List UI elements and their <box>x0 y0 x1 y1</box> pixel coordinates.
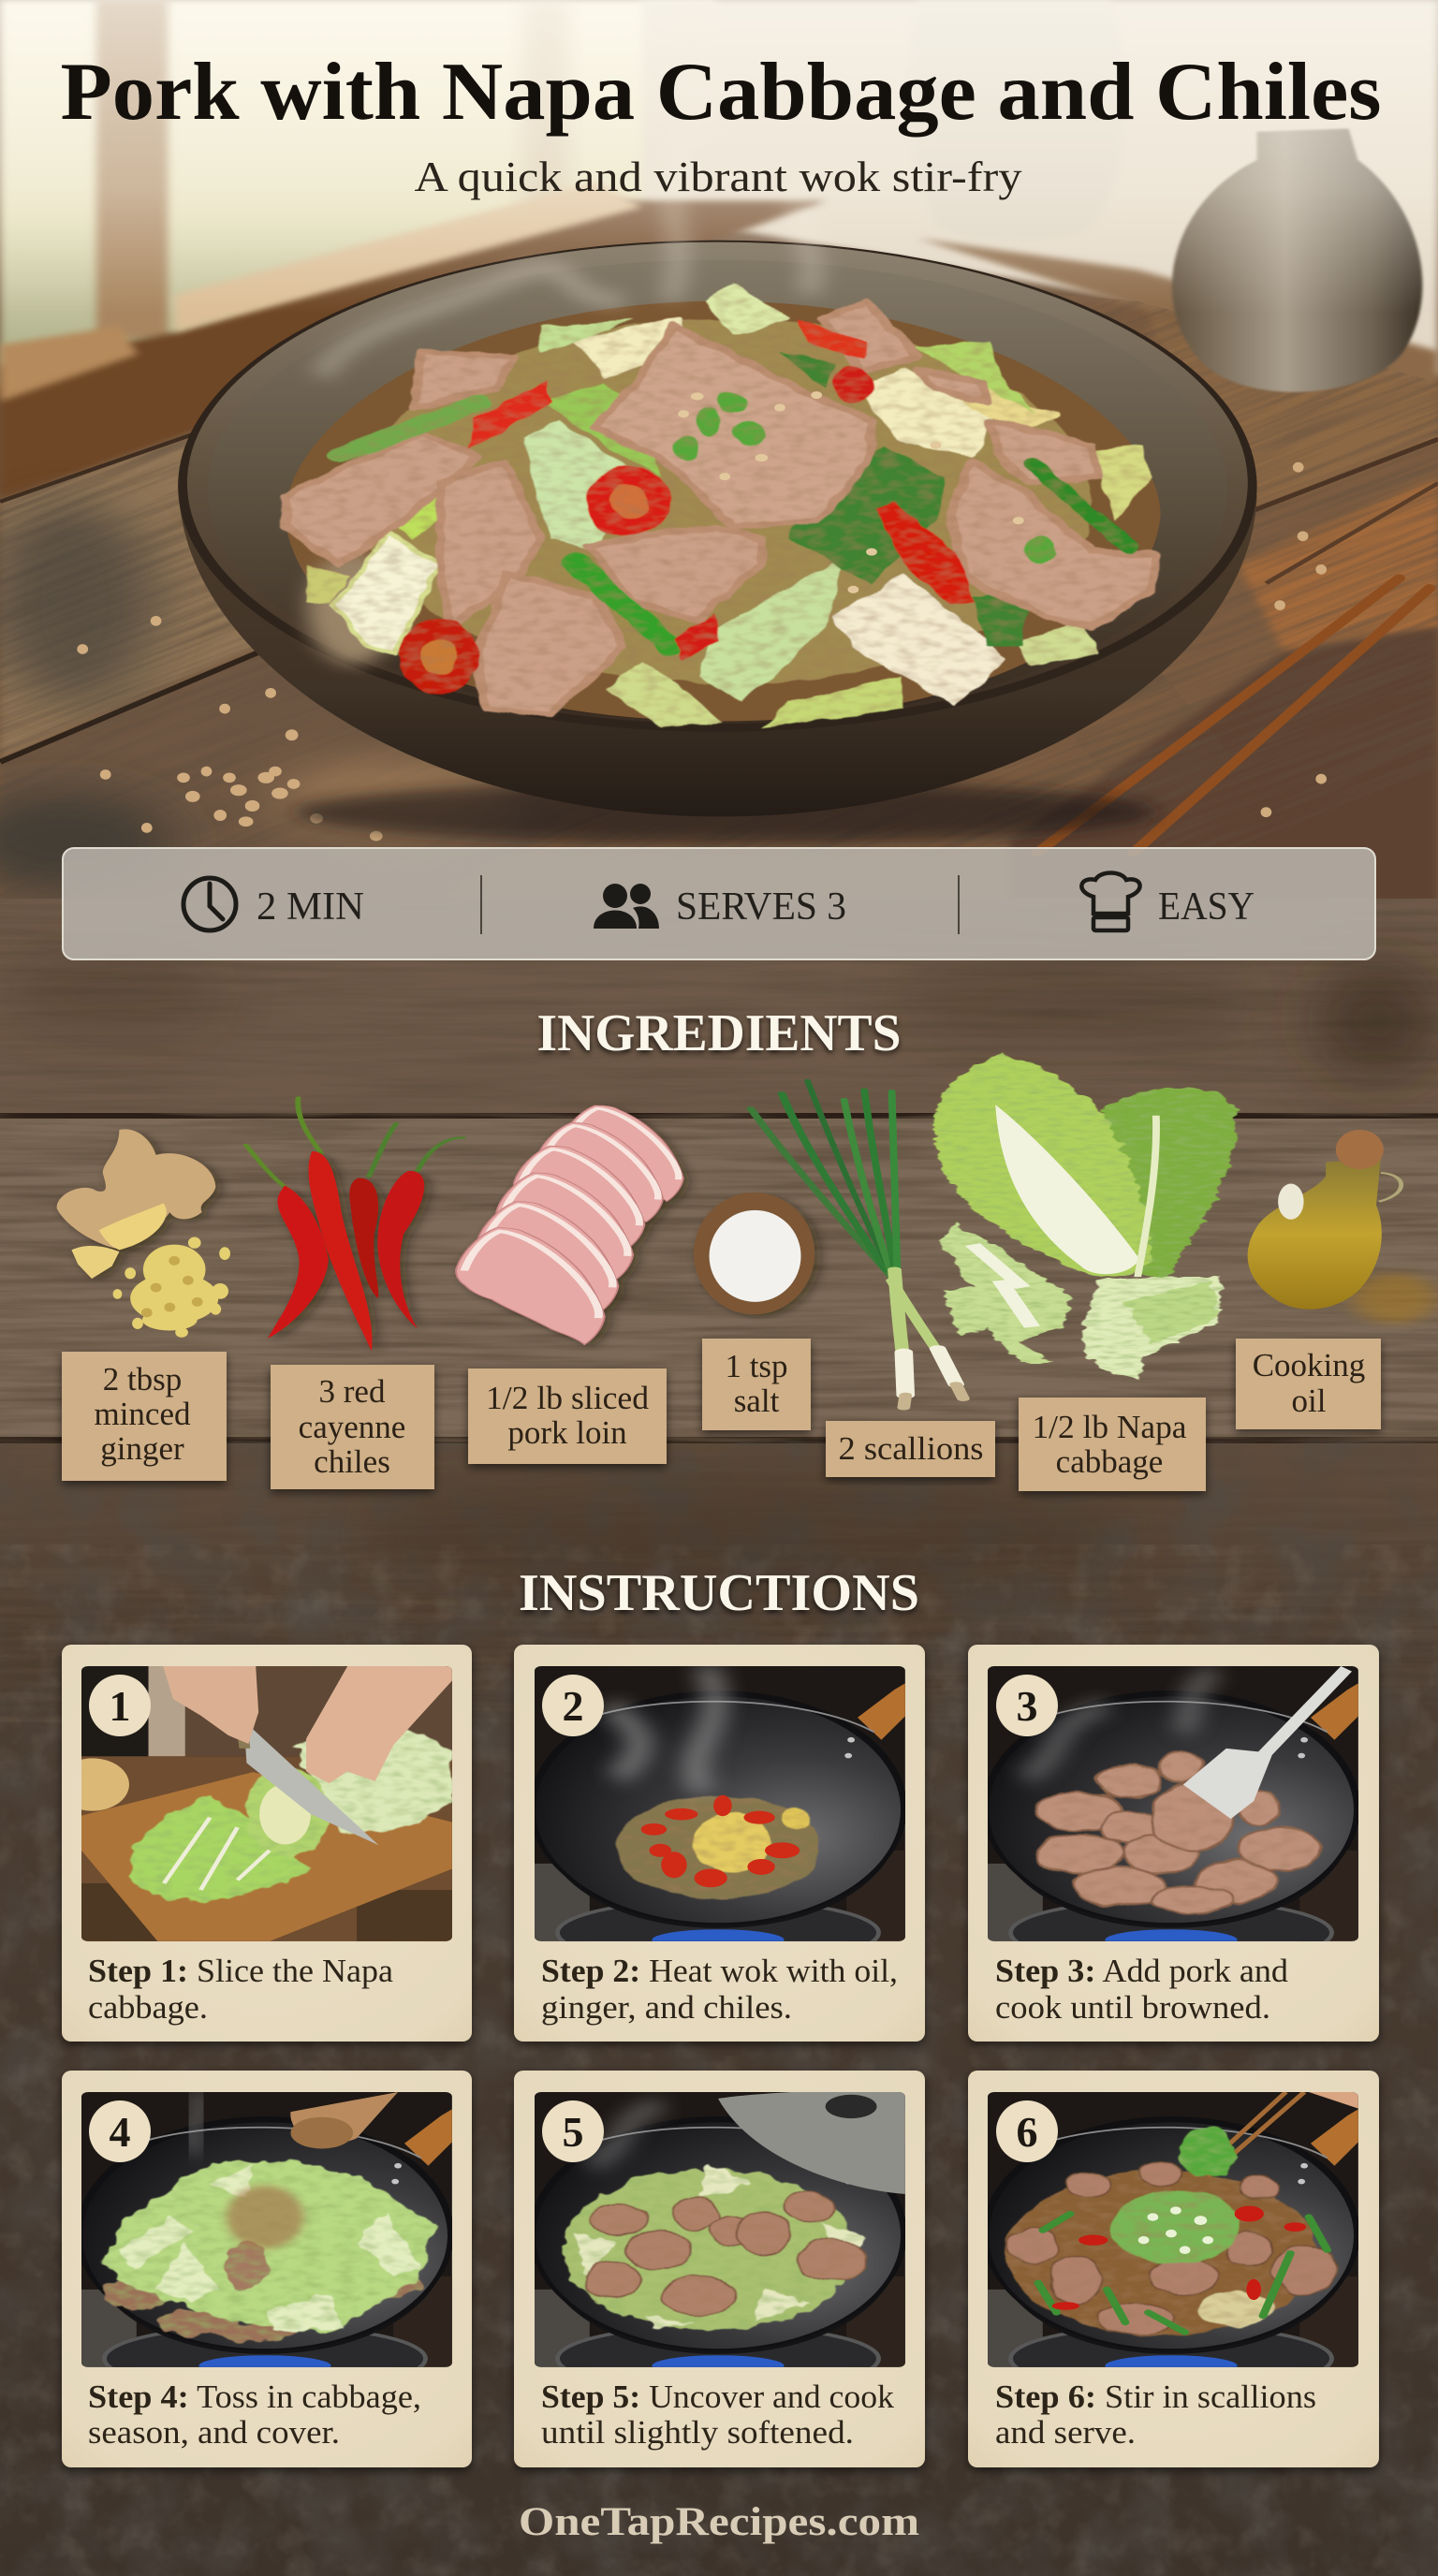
label: oil: Cooking <box>1253 1347 1365 1383</box>
number badge 6: 6 <box>1017 2108 1037 2156</box>
step 3 text: cook until browned. <box>995 1989 1270 2026</box>
steam <box>321 0 812 376</box>
step 2 text <box>541 1953 898 2026</box>
hero photo: bowl of stir-fry on wooden table <box>0 0 1438 899</box>
ingredients heading: INGREDIENTS <box>537 1004 901 1062</box>
step 2 text: Step 2: Heat wok with oil, <box>541 1953 898 1989</box>
step 5 text: until slightly softened. <box>541 2414 854 2451</box>
number badge 4 <box>89 2100 151 2162</box>
label: scallions <box>826 1421 995 1477</box>
cabbage pale pieces <box>332 285 1096 706</box>
window and backdrop <box>0 0 1438 500</box>
step 3 text: Step 3: Add pork and <box>995 1953 1289 1989</box>
step 4 photo: tossing cabbage <box>76 2092 454 2392</box>
step 6 text: Step 6: Stir in scallions <box>995 2378 1316 2415</box>
oil bottle <box>1248 1130 1437 1324</box>
label: ginger: 2 tbsp <box>103 1361 182 1398</box>
label: chiles: cayenne <box>299 1409 405 1445</box>
step card 3 <box>968 1645 1379 2042</box>
step 4 text: Step 4: Toss in cabbage, <box>88 2378 421 2415</box>
number badge 4: 4 <box>109 2108 131 2156</box>
number badge 6 <box>996 2100 1058 2162</box>
sesame on food <box>678 391 1024 593</box>
sesame seeds on table <box>77 462 1327 841</box>
icon: clock <box>183 878 236 930</box>
haze over the title <box>0 0 1438 314</box>
step 5 text: Step 5: Uncover and cook <box>541 2378 895 2415</box>
label: chiles: 3 red <box>319 1373 386 1410</box>
title: Pork with Napa Cabbage and Chiles <box>60 47 1382 138</box>
cabbage green leaves <box>307 320 1152 727</box>
label: cabbage <box>1019 1398 1206 1491</box>
label: ginger: ginger <box>100 1430 184 1467</box>
label: pork: 1/2 lb sliced <box>486 1380 650 1416</box>
step 3 photo: browning pork <box>982 1666 1360 1966</box>
label: ginger <box>62 1352 227 1481</box>
label: chiles <box>271 1365 434 1489</box>
label: pork <box>468 1368 667 1464</box>
table planks <box>0 236 1438 899</box>
step 2 photo: heating wok <box>529 1666 907 1966</box>
label: cabbage: cabbage <box>1056 1443 1163 1480</box>
chiles <box>246 1098 463 1352</box>
label: scallions: 2 scallions <box>839 1430 983 1467</box>
filler layer <box>358 320 1092 683</box>
minced ginger <box>113 1237 230 1338</box>
number badge 3 <box>996 1675 1058 1736</box>
bowl of salt <box>694 1193 814 1314</box>
time: 2 MIN <box>257 886 364 929</box>
label: cabbage: 1/2 lb Napa <box>1032 1409 1187 1445</box>
number badge 1: 1 <box>109 1682 131 1730</box>
number badge 1 <box>89 1675 151 1736</box>
lower surface <box>0 1442 1438 2576</box>
stir-fry <box>285 285 1156 727</box>
pork slices <box>285 301 1156 715</box>
label: oil: oil <box>1292 1383 1327 1419</box>
ceramic vase <box>1172 128 1422 392</box>
step 6 photo: adding scallions <box>982 2092 1360 2392</box>
servings: SERVES 3 <box>676 886 846 929</box>
label: ginger: minced <box>94 1396 191 1432</box>
label: salt: 1 tsp <box>725 1348 788 1384</box>
subtitle: A quick and vibrant wok stir-fry <box>414 153 1022 200</box>
dark green greens <box>780 351 1028 646</box>
green onion pieces <box>342 402 1128 646</box>
upper plank <box>0 899 1438 1116</box>
bowl <box>178 241 1257 843</box>
step card 6 <box>968 2071 1379 2467</box>
label: oil <box>1236 1339 1381 1429</box>
ingredient labels <box>62 1339 1381 1491</box>
step 1 text: Step 1: Slice the Napa <box>88 1953 393 1989</box>
icon: people <box>594 884 659 929</box>
label: chiles: chiles <box>314 1443 390 1480</box>
stats bar <box>63 848 1375 959</box>
step 1 text <box>88 1953 393 2026</box>
white jar <box>921 0 1107 2</box>
instructions heading: INSTRUCTIONS <box>519 1564 919 1622</box>
ingredient illustrations <box>57 1053 1437 1408</box>
step card 5 <box>514 2071 925 2467</box>
middle plank <box>0 1116 1438 1440</box>
scallions <box>751 1080 963 1408</box>
step 4 text <box>88 2378 421 2451</box>
step 4 text: season, and cover. <box>88 2414 340 2451</box>
step 1 photo: slicing cabbage <box>56 1666 452 1941</box>
chopsticks <box>1036 578 1430 853</box>
scallion garnish <box>673 392 1055 564</box>
step card 2 <box>514 1645 925 2042</box>
step 1 text: cabbage. <box>88 1989 208 2026</box>
sliced pork <box>456 1105 683 1344</box>
footer: website: OneTapRecipes.com <box>519 2500 919 2544</box>
number badge 2 <box>542 1675 604 1736</box>
step card 4 <box>62 2071 472 2467</box>
label: salt: salt <box>734 1383 780 1419</box>
ginger <box>57 1129 230 1338</box>
step 6 text <box>995 2378 1316 2451</box>
number badge 5 <box>542 2100 604 2162</box>
number badge 3: 3 <box>1017 1682 1037 1730</box>
step 3 text <box>995 1953 1289 2026</box>
step 5 photo: uncovering wok <box>529 2089 907 2392</box>
step 6 text: and serve. <box>995 2414 1136 2451</box>
number badge 5: 5 <box>562 2108 584 2156</box>
step card 1 <box>56 1645 472 2042</box>
number badge 2: 2 <box>562 1682 584 1730</box>
napa cabbage <box>934 1053 1236 1379</box>
label: pork: pork loin <box>507 1414 627 1451</box>
label: salt <box>702 1339 811 1430</box>
icon: chef hat <box>1081 872 1140 930</box>
chile slices <box>398 321 975 695</box>
difficulty: EASY <box>1158 886 1255 929</box>
step 2 text: ginger, and chiles. <box>541 1989 792 2026</box>
step 5 text <box>541 2378 895 2451</box>
